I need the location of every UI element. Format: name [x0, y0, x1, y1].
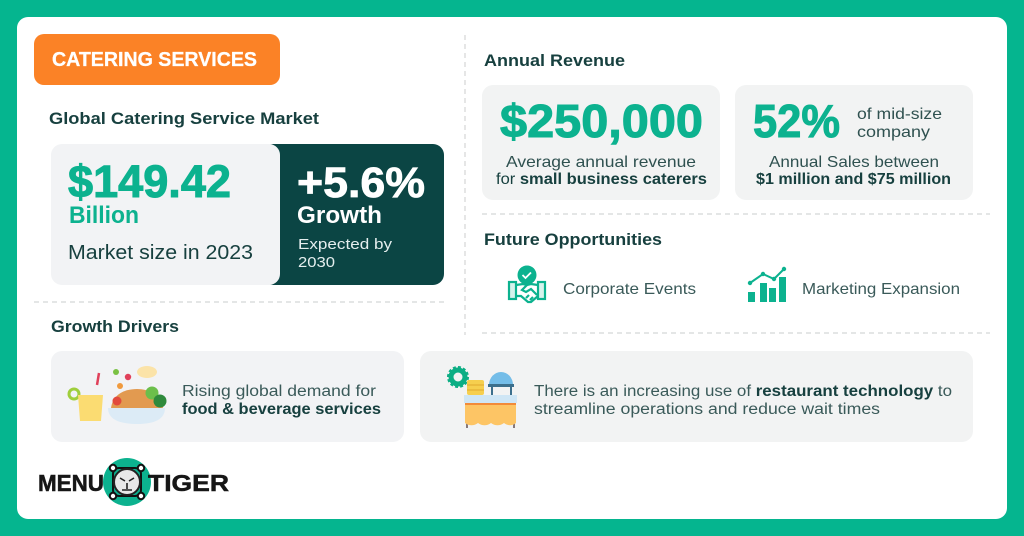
icon: handshake with check: [509, 266, 545, 302]
panel: technology driver: streamline operations and reduce wait times: [534, 401, 880, 418]
growth panel: [262, 144, 444, 285]
panel: technology driver: [420, 351, 973, 442]
panel: small business revenue: [482, 85, 720, 200]
panel: mid-size revenue: [735, 85, 973, 200]
panel: mid-size revenue: company: [857, 124, 930, 141]
title badge: CATERING SERVICES: [52, 49, 257, 71]
icon: catering table: [448, 367, 517, 428]
heading: growth drivers: Growth Drivers: [51, 317, 179, 336]
logo: menu tiger: MENU: [38, 470, 104, 496]
label: corporate events: Corporate Events: [563, 281, 696, 298]
panel: mid-size revenue: $1 million and $75 million: [756, 171, 951, 188]
growth panel: 2030: [298, 254, 335, 271]
market size panel: [51, 144, 280, 285]
market size panel: $149.42: [68, 156, 231, 207]
panel: small business revenue: $250,000: [500, 95, 703, 147]
panel: demand driver: [51, 351, 404, 442]
label: marketing expansion: Marketing Expansion: [802, 281, 960, 298]
growth panel: Expected by: [298, 236, 393, 253]
growth panel: +5.6%: [297, 159, 425, 207]
icon: food and drink: [68, 366, 166, 424]
heading: global market: Global Catering Service Market: [49, 109, 319, 128]
growth panel: Growth: [297, 202, 382, 229]
panel: technology driver: There is an increasing use of restaurant technology to: [534, 383, 952, 400]
heading: annual revenue: Annual Revenue: [484, 51, 625, 70]
panel: demand driver: food & beverage services: [182, 401, 381, 418]
title badge: [34, 34, 280, 85]
logo: menu tiger: [38, 458, 229, 506]
panel: small business revenue: Average annual revenue: [506, 154, 696, 171]
panel: market figures: [51, 144, 444, 285]
panel: mid-size revenue: of mid-size: [857, 106, 942, 123]
panel: mid-size revenue: Annual Sales between: [769, 154, 939, 171]
market size panel: Billion: [69, 202, 139, 229]
panel: small business revenue: for small business caterers: [496, 171, 707, 188]
panel: mid-size revenue: 52%: [753, 95, 840, 147]
heading: future opportunities: Future Opportunities: [484, 230, 662, 249]
panel: demand driver: Rising global demand for: [182, 383, 376, 400]
market size panel: Market size in 2023: [68, 242, 253, 264]
logo: menu tiger: TIGER: [148, 470, 229, 496]
icon: growth chart: [748, 267, 786, 302]
